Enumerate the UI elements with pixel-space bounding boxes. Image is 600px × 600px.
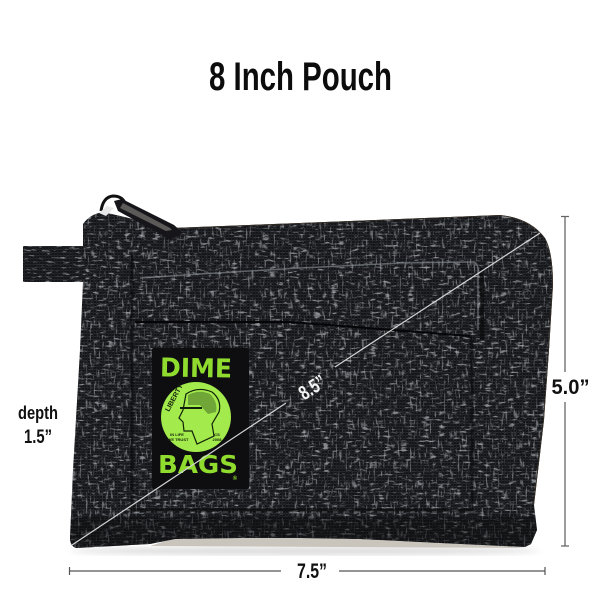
zipper pull bbox=[99, 196, 183, 240]
width label: 7.5” bbox=[297, 560, 327, 583]
lower dark band bbox=[70, 516, 537, 548]
coin: 2008 bbox=[213, 437, 222, 442]
height label: 5.0” bbox=[552, 376, 590, 399]
zipper edge bbox=[172, 215, 553, 505]
label word: DIME: DIME bbox=[160, 353, 232, 385]
coin: WE TRUST bbox=[168, 437, 189, 442]
woven label bbox=[152, 348, 249, 489]
label word: BAGS: BAGS bbox=[158, 450, 238, 479]
pouch shadow bbox=[70, 547, 540, 555]
depth label: depth bbox=[18, 403, 58, 423]
pouch body bbox=[60, 205, 560, 556]
coin text: LIBERTY bbox=[165, 383, 185, 413]
depth label bbox=[18, 403, 58, 448]
pouch bbox=[23, 196, 560, 556]
diagonal label: 8.5” bbox=[295, 371, 330, 405]
hanging loop tab bbox=[23, 246, 87, 282]
coin bbox=[161, 382, 231, 452]
depth label: 1.5” bbox=[24, 427, 52, 448]
registered mark: ® bbox=[233, 475, 238, 482]
pouch underside band bbox=[150, 538, 525, 548]
width measure 7.5 bbox=[70, 560, 545, 583]
title: 8 Inch Pouch bbox=[209, 55, 392, 99]
front pocket bbox=[132, 255, 482, 512]
coin: IN LIFE bbox=[170, 432, 184, 437]
coin: CS bbox=[214, 432, 220, 437]
height measure 5.0 bbox=[552, 216, 590, 546]
